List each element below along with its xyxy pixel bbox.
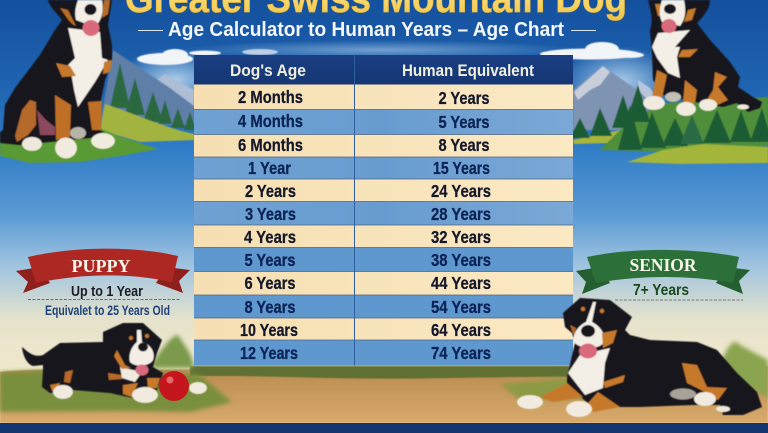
table header: Dog's Age — [230, 62, 306, 80]
age column — [238, 87, 303, 363]
data table — [194, 55, 573, 366]
table header — [194, 55, 573, 84]
right mountains, trees and islands — [570, 66, 768, 164]
clouds — [137, 42, 644, 65]
human equivalent column: 64 Years — [431, 320, 491, 340]
bottom bar — [0, 423, 768, 433]
human equivalent column — [431, 88, 491, 363]
age column: 10 Years — [240, 320, 298, 340]
age column: 2 Years — [245, 181, 296, 201]
age column: 5 Years — [244, 250, 296, 270]
ground — [0, 335, 768, 423]
age column: 3 Years — [245, 204, 296, 224]
age column: 4 Months — [238, 111, 303, 131]
age column: 12 Years — [240, 343, 298, 363]
table rows — [194, 55, 573, 366]
age column: 1 Year — [248, 158, 291, 178]
human equivalent column: 28 Years — [431, 204, 491, 224]
table header: Human Equivalent — [402, 62, 534, 80]
human equivalent column: 54 Years — [431, 297, 491, 317]
age column: 6 Years — [244, 273, 296, 293]
human equivalent column: 32 Years — [431, 227, 491, 247]
dog: left sitting adult — [0, 0, 115, 158]
dog: right sitting puppy — [643, 0, 762, 116]
senior callout: 7+ Years — [633, 282, 689, 299]
age column: 6 Months — [238, 135, 303, 155]
human equivalent column: 74 Years — [431, 343, 491, 363]
human equivalent column: 24 Years — [431, 181, 491, 201]
human equivalent column: 15 Years — [433, 158, 490, 178]
human equivalent column: 5 Years — [438, 112, 490, 132]
puppy callout: Equivalet to 25 Years Old — [45, 303, 170, 318]
dog: puppy lying with ball — [22, 323, 207, 403]
puppy callout — [16, 249, 190, 318]
senior callout — [576, 250, 750, 300]
human equivalent column: 8 Years — [438, 135, 490, 155]
age column: 8 Years — [244, 297, 296, 317]
icon: red ball — [159, 371, 189, 401]
left mountains and trees — [0, 50, 196, 163]
age column: 4 Years — [244, 227, 296, 247]
subtitle: Age Calculator to Human Years – Age Chart — [168, 19, 564, 41]
senior ribbon — [576, 250, 750, 294]
puppy ribbon — [16, 249, 190, 293]
senior ribbon: SENIOR — [630, 255, 697, 275]
puppy ribbon: PUPPY — [72, 256, 131, 276]
dog: senior lying — [517, 298, 762, 417]
human equivalent column: 38 Years — [431, 250, 491, 270]
human equivalent column: 44 Years — [431, 273, 491, 293]
puppy callout: Up to 1 Year — [71, 283, 143, 300]
human equivalent column: 2 Years — [438, 88, 490, 108]
age column: 2 Months — [238, 87, 303, 107]
